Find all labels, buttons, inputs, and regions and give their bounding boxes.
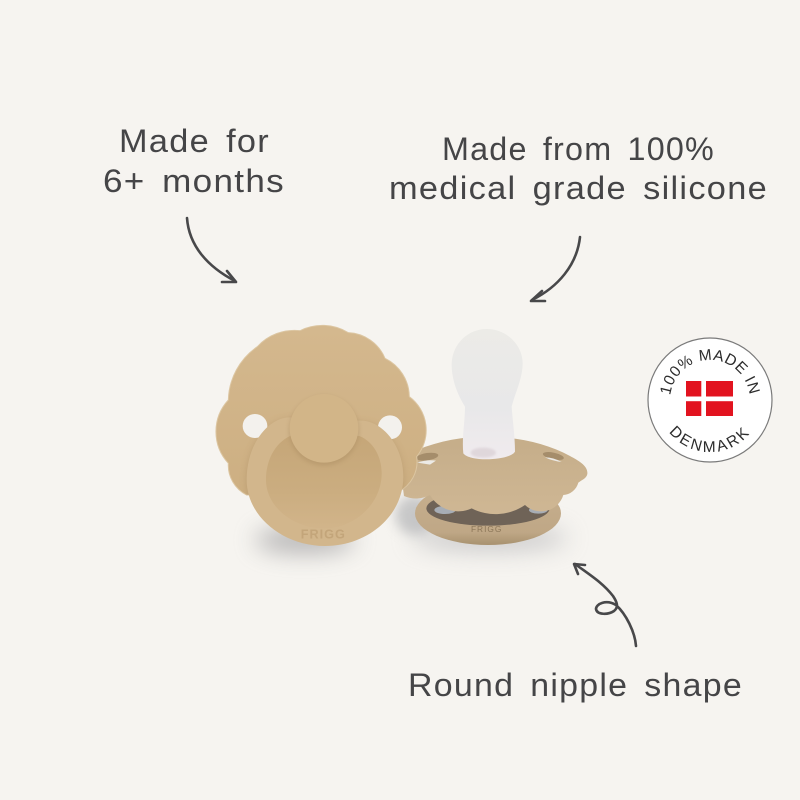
ring shadow on shield [246,462,404,495]
arrow: to nipple pacifier [531,237,580,301]
logo emboss: FRIGG [301,528,346,542]
heading: round nipple shape: Round nipple shape [408,667,743,703]
button [290,394,358,463]
scalloped shield [216,325,426,495]
arrow: to left pacifier [187,218,236,282]
heading: made for 6+ months: Made for [119,123,270,159]
badge curved text [660,349,760,452]
button shadow [289,396,359,466]
heading: made from 100% medical grade silicone [389,131,768,206]
soft shadow under pacifiers [255,495,568,553]
inner recess [263,433,385,532]
Danish flag [686,381,733,416]
heading: made for 6+ months [103,123,285,199]
shield of side pacifier [400,437,587,514]
ring handle [247,417,403,546]
badge curved text: DENMARK [670,426,750,452]
badge: 100% made in Denmark [647,337,773,463]
pacifier: side view with nipple [400,329,587,545]
finger holes [243,414,402,439]
shield holes [416,451,564,465]
ring of side pacifier: FRIGG [471,524,502,534]
ring of side pacifier [415,482,561,545]
badge curved text: 100% MADE IN [660,349,760,394]
heading: made for 6+ months: 6+ months [103,163,285,199]
arrow: looped, to nipple shape [574,564,636,646]
heading: made from 100% medical grade silicone: Made from 100% [442,131,715,167]
pacifier: front view [216,325,426,548]
heading: made from 100% medical grade silicone: medical grade silicone [389,170,768,206]
silicone nipple [452,329,523,459]
